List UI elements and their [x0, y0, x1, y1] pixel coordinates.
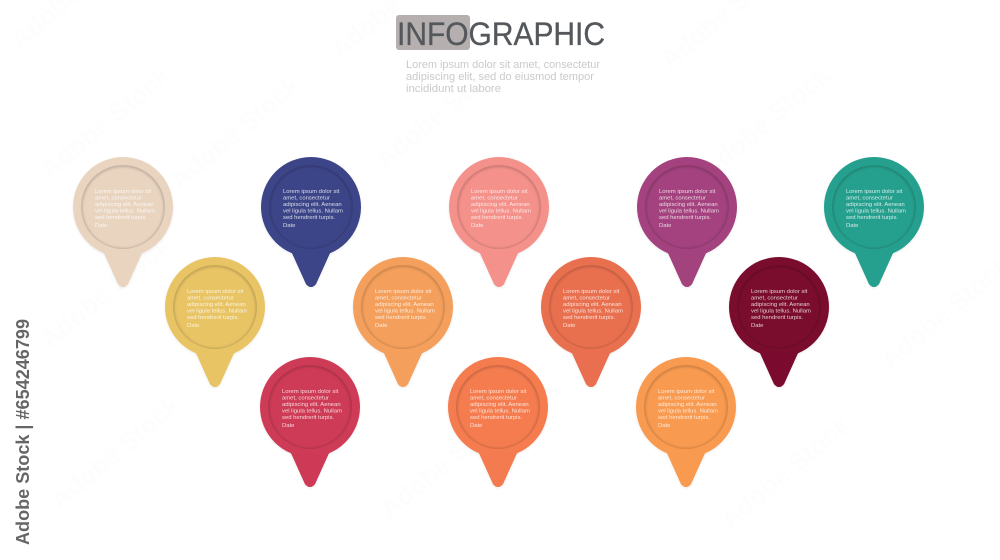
- pin: red orange: Date: [563, 323, 576, 329]
- pin: yellow: Date: [187, 323, 200, 329]
- pin: yellow: sed hendrerit turpis.: [187, 315, 239, 321]
- pin: crimson: Lorem ipsum dolor sit: [282, 389, 339, 395]
- watermark pattern: Adobe Stock: [45, 389, 186, 515]
- pin: plum: [637, 157, 737, 287]
- pin: pink: Lorem ipsum dolor sit: [471, 189, 528, 195]
- pin: yellow: Lorem ipsum dolor sit: [187, 289, 244, 295]
- pin: navy: Date: [283, 223, 296, 229]
- title: [396, 15, 605, 52]
- pin: plum: Lorem ipsum dolor sit: [659, 189, 716, 195]
- pin: beige: adipiscing elit. Aenean: [95, 202, 154, 208]
- pin: pink: vel ligula tellus. Nullam: [471, 208, 531, 214]
- pin: coral: sed hendrerit turpis.: [470, 415, 522, 421]
- pin: plum: sed hendrerit turpis.: [659, 215, 711, 221]
- pin: light orange: sed hendrerit turpis.: [375, 315, 427, 321]
- pin: red orange: vel ligula tellus. Nullam: [563, 308, 623, 314]
- pin: orange: vel ligula tellus. Nullam: [658, 408, 718, 414]
- watermark pattern: Adobe Stock: [370, 49, 511, 175]
- watermark pattern: Adobe Stock: [375, 399, 516, 525]
- pin: crimson: Date: [282, 423, 295, 429]
- pin: light orange: Date: [375, 323, 388, 329]
- pin: beige: sed hendrerit turpis.: [95, 215, 147, 221]
- pin: pink: sed hendrerit turpis.: [471, 215, 523, 221]
- subtitle: incididunt ut labore: [406, 83, 501, 95]
- pin: orange: Date: [658, 423, 671, 429]
- pin: maroon: Lorem ipsum dolor sit: [751, 289, 808, 295]
- pin: pink: amet, consectetur: [471, 196, 518, 202]
- title highlight: [396, 15, 470, 50]
- pin: pink: Date: [471, 223, 484, 229]
- pin: maroon: [729, 257, 829, 387]
- pin: yellow: [165, 257, 265, 387]
- pin: coral: amet, consectetur: [470, 396, 517, 402]
- pin: red orange: sed hendrerit turpis.: [563, 315, 615, 321]
- pin: red orange: amet, consectetur: [563, 296, 610, 302]
- watermark pattern: Adobe Stock: [695, 59, 836, 185]
- watermark pattern: Adobe Stock: [165, 69, 306, 195]
- pin: coral: [448, 357, 548, 487]
- pin: navy: Lorem ipsum dolor sit: [283, 189, 340, 195]
- subtitle: [406, 59, 600, 95]
- pin: coral: Date: [470, 423, 483, 429]
- pin: crimson: amet, consectetur: [282, 396, 329, 402]
- pin: maroon: amet, consectetur: [751, 296, 798, 302]
- pin: crimson: vel ligula tellus. Nullam: [282, 408, 342, 414]
- pin: beige: Lorem ipsum dolor sit: [95, 189, 152, 195]
- pin: light orange: amet, consectetur: [375, 296, 422, 302]
- watermark pattern: Adobe Stock: [35, 59, 176, 185]
- pin: teal: amet, consectetur: [846, 196, 893, 202]
- pin: yellow: amet, consectetur: [187, 296, 234, 302]
- pin: crimson: sed hendrerit turpis.: [282, 415, 334, 421]
- pin: maroon: sed hendrerit turpis.: [751, 315, 803, 321]
- pin: maroon: vel ligula tellus. Nullam: [751, 308, 811, 314]
- pin: plum: Date: [659, 223, 672, 229]
- pin: beige: [73, 157, 173, 287]
- pin: red orange: Lorem ipsum dolor sit: [563, 289, 620, 295]
- subtitle: adipiscing elit, sed do eiusmod tempor: [406, 71, 594, 83]
- pin: navy: adipiscing elit. Aenean: [283, 202, 342, 208]
- pin: red orange: [541, 257, 641, 387]
- pin: orange: adipiscing elit. Aenean: [658, 402, 717, 408]
- pin: orange: Lorem ipsum dolor sit: [658, 389, 715, 395]
- pin: light orange: vel ligula tellus. Nullam: [375, 308, 435, 314]
- pin: pink: [449, 157, 549, 287]
- pin: navy: sed hendrerit turpis.: [283, 215, 335, 221]
- pin: navy: [261, 157, 361, 287]
- pin: teal: [824, 157, 924, 287]
- pin: teal: sed hendrerit turpis.: [846, 215, 898, 221]
- pin: pink: adipiscing elit. Aenean: [471, 202, 530, 208]
- pin: orange: amet, consectetur: [658, 396, 705, 402]
- pin: coral: vel ligula tellus. Nullam: [470, 408, 530, 414]
- pin: crimson: adipiscing elit. Aenean: [282, 402, 341, 408]
- pin: plum: adipiscing elit. Aenean: [659, 202, 718, 208]
- watermark pattern: Adobe Stock: [35, 229, 176, 355]
- pin: light orange: adipiscing elit. Aenean: [375, 302, 434, 308]
- stock id label: Adobe Stock | #654246799: [13, 319, 33, 545]
- pin: yellow: adipiscing elit. Aenean: [187, 302, 246, 308]
- pin: beige: vel ligula tellus. Nullam: [95, 208, 155, 214]
- pin: coral: adipiscing elit. Aenean: [470, 402, 529, 408]
- pin: maroon: adipiscing elit. Aenean: [751, 302, 810, 308]
- pin: plum: amet, consectetur: [659, 196, 706, 202]
- pin: orange: sed hendrerit turpis.: [658, 415, 710, 421]
- pin: maroon: Date: [751, 323, 764, 329]
- pin: coral: Lorem ipsum dolor sit: [470, 389, 527, 395]
- pin: orange: [636, 357, 736, 487]
- pin: light orange: Lorem ipsum dolor sit: [375, 289, 432, 295]
- pin: yellow: vel ligula tellus. Nullam: [187, 308, 247, 314]
- pin: light orange: [353, 257, 453, 387]
- pin: teal: adipiscing elit. Aenean: [846, 202, 905, 208]
- title text: INFOGRAPHIC: [397, 16, 605, 52]
- pin: crimson: [260, 357, 360, 487]
- pin: teal: vel ligula tellus. Nullam: [846, 208, 906, 214]
- pin: navy: vel ligula tellus. Nullam: [283, 208, 343, 214]
- pin: plum: vel ligula tellus. Nullam: [659, 208, 719, 214]
- pin: beige: amet, consectetur: [95, 196, 142, 202]
- watermark pattern: Adobe Stock: [715, 409, 856, 535]
- subtitle: Lorem ipsum dolor sit amet, consectetur: [406, 59, 600, 71]
- pin: teal: Date: [846, 223, 859, 229]
- pin: navy: amet, consectetur: [283, 196, 330, 202]
- pin: beige: Date: [95, 223, 108, 229]
- pin: red orange: adipiscing elit. Aenean: [563, 302, 622, 308]
- pin: teal: Lorem ipsum dolor sit: [846, 189, 903, 195]
